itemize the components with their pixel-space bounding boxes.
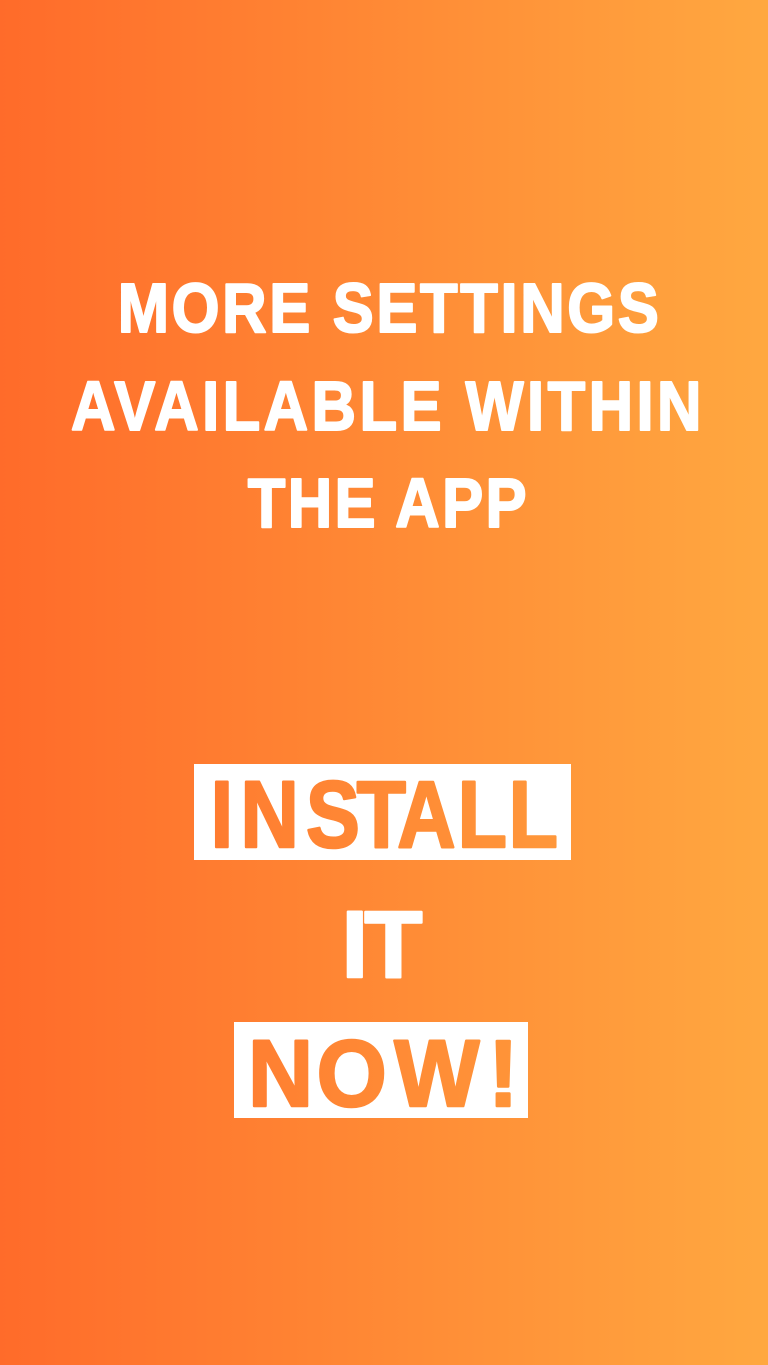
text: it: IT: [342, 892, 422, 998]
button: now: NOW!: [248, 1020, 518, 1127]
heading line 3: THE APP: [248, 463, 527, 542]
heading line 2: AVAILABLE WITHIN: [71, 366, 702, 445]
heading: more settings available within the app: [71, 268, 702, 542]
heading line 1: MORE SETTINGS: [118, 268, 659, 347]
button: install: INSTALL: [211, 761, 558, 867]
